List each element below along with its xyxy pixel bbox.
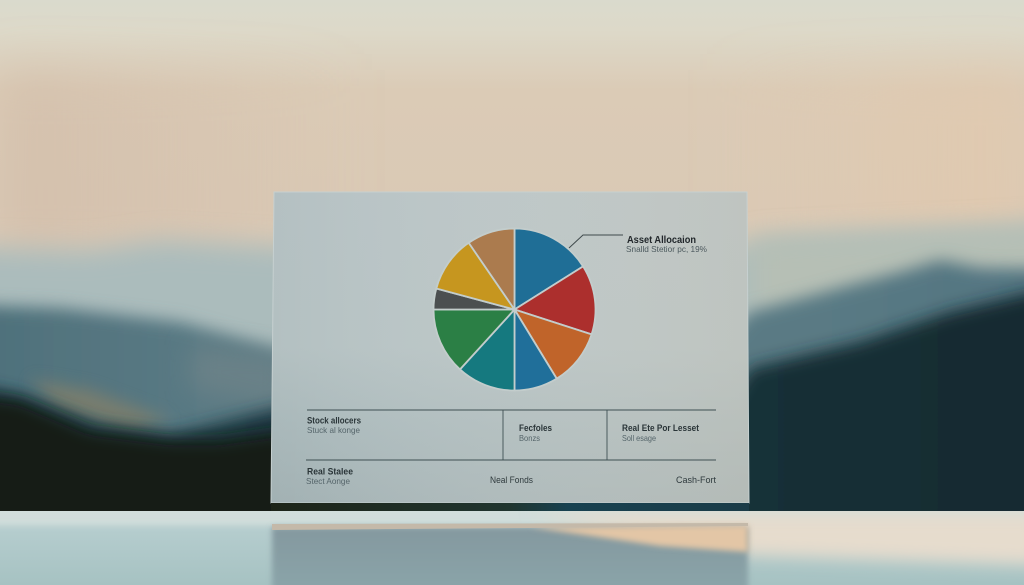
table cell: real estate: Real Stalee [307, 466, 353, 476]
callout leader line [569, 235, 623, 248]
table surface [0, 505, 1024, 585]
table cell: real estate: Stect Aonge [306, 476, 350, 486]
table cell: cash: Cash-Fort [676, 475, 716, 486]
pie chart: asset allocation [434, 228, 596, 390]
callout label: asset allocation: Snalld Stetior pc, 19% [626, 244, 707, 254]
table grid lines [306, 410, 716, 460]
table cell: stock allocations: Stuck al konge [307, 425, 360, 435]
mid mountains [0, 251, 1024, 440]
far haze [0, 218, 1024, 342]
table cell: real estate per asset: Soll esage [622, 433, 656, 443]
table cell: real estate [306, 466, 353, 486]
card reflection on the table [272, 523, 748, 585]
table cell: stock allocations [307, 416, 361, 435]
table cell: real estate per asset: Real Ete Por Lesset [622, 423, 699, 433]
panel: glass card [271, 192, 749, 511]
dark foreground [0, 282, 1024, 511]
callout label: asset allocation [626, 235, 707, 254]
table cell: bonds: Bonzs [519, 433, 540, 443]
table cell: real funds: Neal Fonds [490, 475, 533, 486]
callout label: asset allocation: Asset Allocaion [627, 235, 696, 246]
table cell: stock allocations: Stock allocers [307, 416, 361, 426]
table cell: bonds [519, 423, 552, 443]
table cell: real estate per asset [622, 423, 699, 443]
table cell: bonds: Fecfoles [519, 423, 552, 433]
